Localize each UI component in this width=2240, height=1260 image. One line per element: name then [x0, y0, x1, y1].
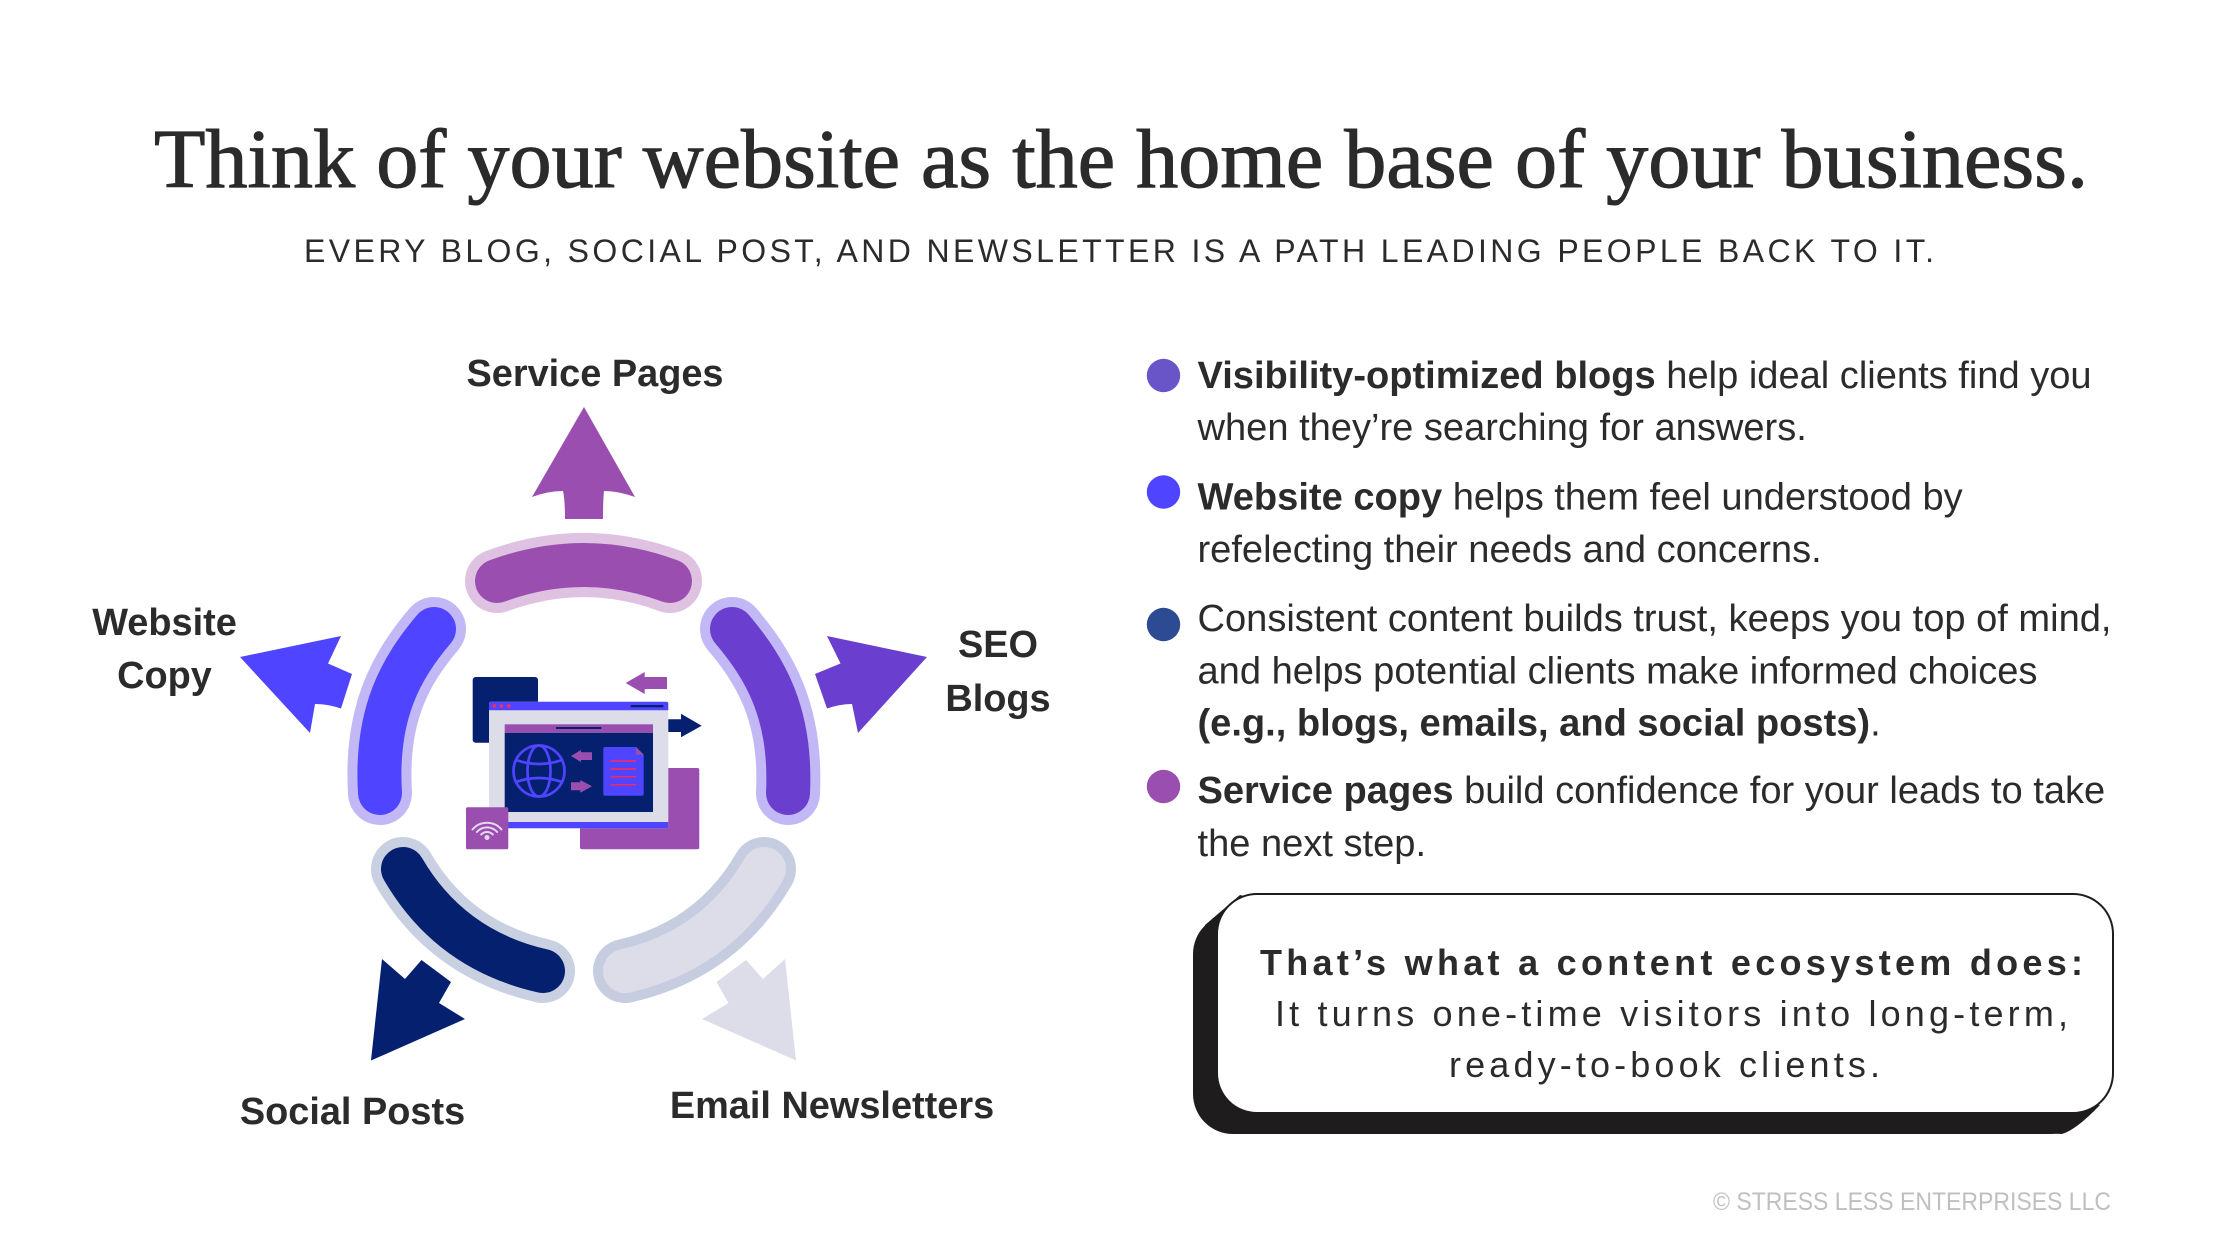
bullet: visibility-optimized blogs: when they’re searching for answers. [1196, 407, 1807, 449]
bullet list [1147, 355, 2112, 865]
label: Social Posts: Social Posts [240, 1091, 465, 1133]
label: Email Newsletters: Email Newsletters [670, 1085, 994, 1127]
arrow: SEO Blogs [815, 636, 927, 733]
arc: Service Pages [497, 565, 670, 581]
arrow: Email Newsletters [702, 959, 796, 1060]
arrow: Service Pages [532, 407, 635, 519]
label: Website Copy [92, 602, 237, 697]
label: SEO Blogs: SEO [958, 624, 1038, 666]
arrow: Social Posts [371, 959, 465, 1060]
arc: Social Posts [403, 869, 543, 971]
bullet: consistent content: (e.g., blogs, emails, and social posts). [1198, 702, 1881, 744]
arc: Website Copy [379, 629, 434, 793]
label: SEO Blogs [945, 624, 1051, 720]
bullet: service pages [1147, 770, 2105, 865]
arrow: Website Copy [240, 636, 352, 733]
label: Website Copy: Website [92, 602, 237, 644]
ecosystem diagram [92, 353, 1051, 1133]
copyright footer: © STRESS LESS ENTERPRISES LLC [1713, 1188, 2111, 1216]
callout: That’s what a content ecosystem does: [1260, 942, 2083, 983]
bullet: website copy: Website copy helps them feel understood by [1198, 476, 1963, 518]
bullet: visibility-optimized blogs [1147, 355, 2092, 449]
bullet: visibility-optimized blogs: Visibility-optimized blogs help ideal clients find you [1198, 355, 2092, 397]
icon: website browser illustration [466, 672, 702, 849]
arc: Email Newsletters [625, 869, 764, 971]
bullet: website copy: refelecting their needs and concerns. [1198, 529, 1822, 571]
bullet: website copy [1147, 475, 1963, 571]
callout [1193, 894, 2113, 1134]
label: SEO Blogs: Blogs [945, 678, 1051, 720]
bullet: consistent content: Consistent content builds trust, keeps you top of mind, [1198, 598, 2112, 640]
bullet: consistent content: and helps potential clients make informed choices [1198, 650, 2037, 692]
label: Service Pages: Service Pages [466, 353, 724, 395]
arc: SEO Blogs [732, 629, 788, 793]
bullet: service pages: the next step. [1198, 823, 1426, 865]
bullet: service pages: Service pages build confidence for your leads to take [1198, 770, 2105, 812]
title: Think of your website as the home base of your business. [154, 113, 2088, 206]
callout: ready-to-book clients. [1449, 1044, 1880, 1085]
callout: It turns one-time visitors into long-term, [1275, 993, 2068, 1034]
bullet: consistent content [1147, 598, 2112, 744]
label: Website Copy: Copy [117, 655, 212, 697]
subtitle: EVERY BLOG, SOCIAL POST, AND NEWSLETTER IS A PATH LEADING PEOPLE BACK TO IT. [304, 233, 1934, 269]
